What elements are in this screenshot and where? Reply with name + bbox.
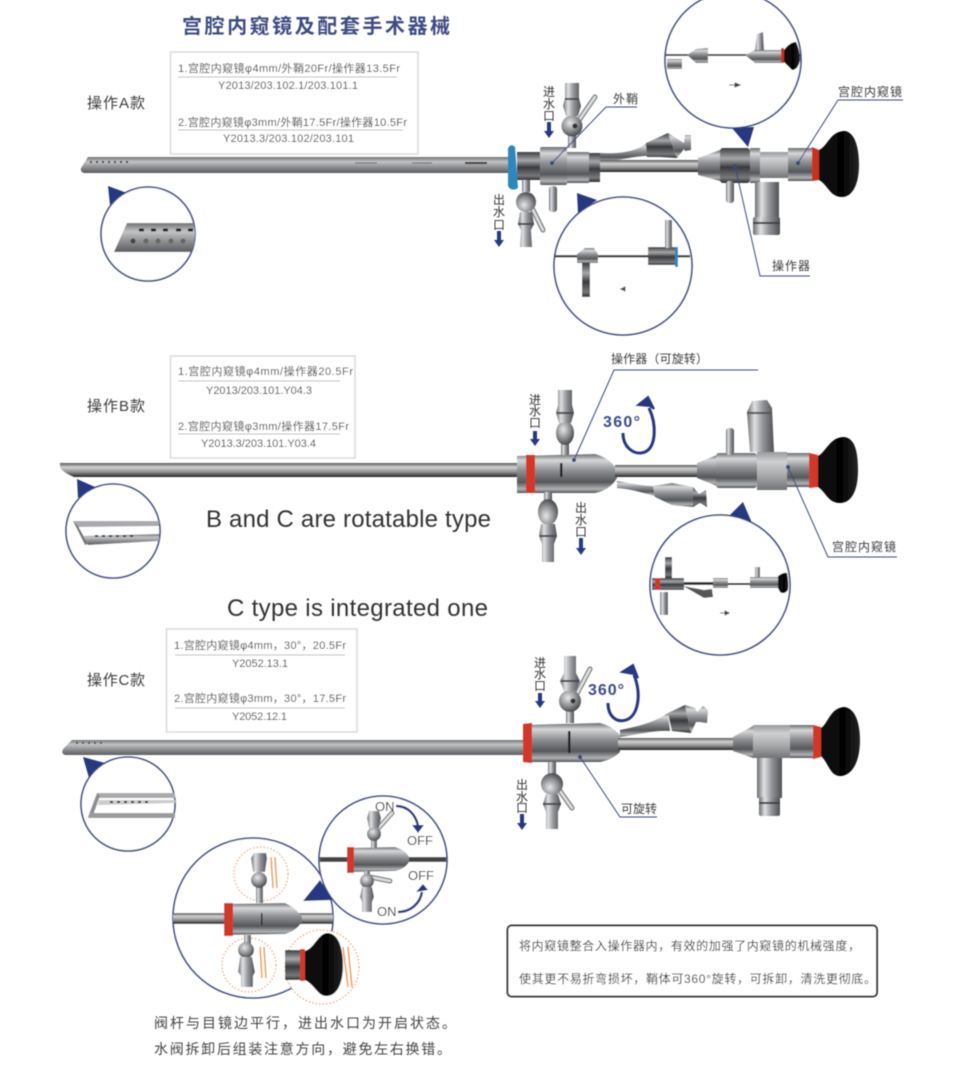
panel: type B [60, 351, 897, 655]
spec box C: 2.宫腔内窥镜φ3mm，30°，17.5Fr [174, 691, 346, 705]
outlet label C: 水 [516, 790, 528, 804]
spec box B: Y2013.3/203.101.Y03.4 [201, 438, 316, 450]
magnifier: valve alignment view [173, 838, 359, 1004]
magnifier: sheath view A [554, 193, 692, 335]
spec box C: Y2052.12.1 [232, 711, 287, 723]
scope A [750, 131, 859, 235]
magnifier: tip B [66, 479, 160, 578]
rotation indicator C: 360° [588, 682, 624, 699]
labels and leaders A: 操作器 [772, 258, 810, 273]
caption: valve instructions [154, 1015, 456, 1057]
outlet valve B [538, 492, 558, 562]
instrument B handle [517, 454, 617, 493]
stopcock arm A [600, 133, 691, 163]
inlet label C: 口 [534, 679, 546, 693]
instrument B shaft [60, 463, 520, 477]
rotation indicator B [603, 397, 654, 453]
outlet valve C [541, 762, 572, 829]
caption: valve instructions: 阀杆与目镜边平行，进出水口为开启状态。 [154, 1015, 456, 1031]
inlet label B [529, 393, 541, 446]
inlet label B: 口 [529, 416, 541, 430]
magnifier: scope view A [665, 0, 801, 147]
magnifier: on/off view [303, 796, 447, 924]
inlet label A: 水 [543, 97, 555, 111]
magnifier: on/off view: ON [377, 904, 396, 919]
inlet label A: 进 [543, 85, 555, 99]
spec box B: 2.宫腔内窥镜φ3mm/操作器17.5Fr [178, 419, 349, 433]
spec box C: Y2052.13.1 [232, 658, 288, 670]
title: 宫腔内窥镜及配套手术器械 [182, 14, 450, 38]
inlet label A [543, 85, 555, 138]
heading: type B: 操作B款 [87, 398, 145, 415]
operator tube A [600, 148, 750, 203]
caption: valve instructions: 水阀拆卸后组装注意方向，避免左右换错。 [154, 1041, 451, 1057]
spec box A: Y2013.3/203.102/203.101 [223, 133, 354, 145]
outlet label B: 水 [575, 513, 587, 527]
outlet valve A [516, 180, 543, 247]
outlet label A: 水 [493, 205, 505, 219]
labels and leaders B: 操作器（可旋转） [611, 351, 708, 366]
inlet label B: 进 [529, 393, 541, 407]
rotation indicator C [588, 665, 638, 721]
scope C [753, 707, 860, 816]
inlet label C [534, 656, 546, 708]
scope B [747, 400, 858, 503]
instrument A sheath shaft [81, 157, 512, 173]
spec box A: 2.宫腔内窥镜φ3mm/外鞘17.5Fr/操作器10.5Fr [178, 115, 407, 129]
outlet label B [575, 501, 587, 555]
highlight: eyepiece [285, 930, 359, 1004]
inlet label A: 口 [543, 109, 555, 123]
magnifier: scope view B [650, 502, 790, 655]
magnifier: on/off view: ON [375, 799, 394, 814]
magnifier: tip C [81, 757, 175, 851]
spec box A: Y2013/203.102.1/203.101.1 [218, 80, 358, 92]
annotation: integrated type: C type is integrated one [227, 595, 488, 622]
labels and leaders A [550, 84, 903, 276]
magnifier: on/off view: OFF [408, 868, 434, 883]
outlet label C: 出 [516, 778, 528, 792]
annotation: rotatable type: B and C are rotatable type [206, 506, 491, 533]
highlight: bottom valve [222, 935, 276, 992]
inlet label C: 水 [534, 667, 546, 681]
callout: scope integration: 将内窥镜整合入操作器内，有效的加强了内窥镜的机械强度， [519, 938, 860, 953]
panel: type A [81, 0, 903, 335]
inlet label B: 水 [529, 404, 541, 418]
inlet valve B [556, 390, 574, 455]
spec box B: Y2013/203.101.Y04.3 [206, 385, 312, 397]
operator tube C [618, 726, 753, 758]
callout: scope integration: 使其更不易折弯损坏，鞘体可360°旋转，可拆卸，清洗更彻底。 [519, 971, 876, 986]
outlet label B: 口 [575, 525, 587, 539]
labels and leaders A: 外鞘 [613, 92, 638, 106]
instrument A outer sheath hub [508, 145, 600, 212]
panel: type C [62, 629, 860, 1004]
magnifier: tip A [101, 186, 196, 281]
spec box B [170, 356, 355, 458]
outlet label A: 出 [493, 193, 505, 207]
highlight: top valve [234, 847, 288, 903]
heading: type C: 操作C款 [87, 672, 145, 689]
spec box B: 1.宫腔内窥镜φ4mm/操作器20.5Fr [178, 364, 353, 378]
outlet label A: 口 [493, 218, 505, 232]
heading: type A: 操作A款 [87, 95, 145, 112]
outlet label C [516, 778, 528, 830]
instrument C shaft [62, 740, 525, 755]
instrument C handle [523, 723, 620, 763]
outlet label A [493, 193, 505, 247]
callout: scope integration [508, 926, 877, 996]
magnifier: on/off view: OFF [407, 833, 433, 848]
spec box C [166, 629, 357, 732]
stopcock arm C [620, 705, 708, 737]
outlet label B: 出 [575, 501, 587, 515]
spec box A: 1.宫腔内窥镜φ4mm/外鞘20Fr/操作器13.5Fr [178, 61, 400, 75]
outlet label C: 口 [516, 801, 528, 815]
stopcock arm B [617, 481, 707, 507]
inlet valve A [562, 83, 595, 148]
labels and leaders C: 可旋转 [621, 801, 657, 816]
labels and leaders B [572, 351, 897, 557]
labels and leaders C [578, 755, 657, 817]
operator tube B [615, 428, 757, 488]
spec box C: 1.宫腔内窥镜φ4mm，30°，20.5Fr [174, 638, 346, 652]
labels and leaders B: 宫腔内窥镜 [832, 539, 896, 554]
labels and leaders A: 宫腔内窥镜 [838, 84, 902, 99]
inlet valve C [559, 656, 590, 723]
rotation indicator B: 360° [603, 414, 640, 431]
spec box A [170, 52, 418, 154]
inlet label C: 进 [534, 656, 546, 670]
